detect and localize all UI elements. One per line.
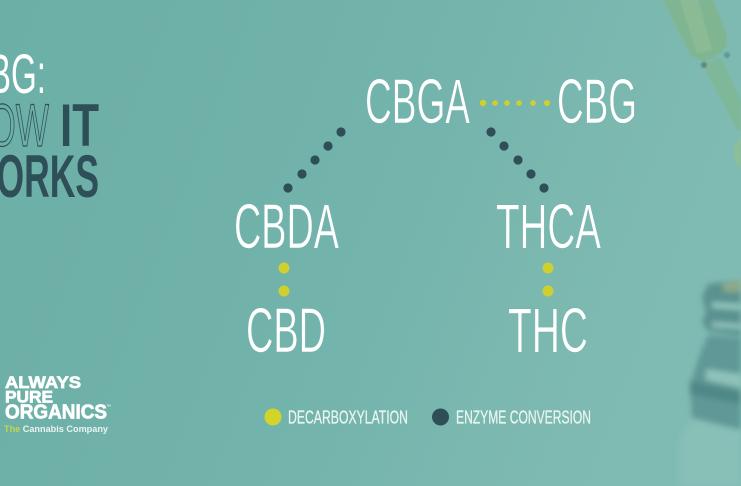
label: THCA: THCA [496,192,601,262]
logo: Always Pure Organics [4,373,111,435]
dots: CBGA to CBDA enzyme conversion [283,127,346,193]
logo tagline: The Cannabis Company [4,424,109,435]
logo: Always Pure Organics: PURE [5,388,53,406]
dots: CBGA to CBG decarboxylation [480,100,550,106]
dots: THCA to THC decarboxylation [542,262,554,296]
label: CBGA: CBGA [365,67,470,137]
legend [264,406,591,428]
image: glass dropper [663,0,741,168]
legend item: decarboxylation [264,406,408,428]
label: CBDA: CBDA [234,192,339,262]
title line: HOW IT: IT [60,92,99,159]
logo: Always Pure Organics: ORGANICS [5,402,107,424]
label: THC: THC [508,296,588,366]
legend item: enzyme conversion: ENZYME CONVERSION [456,406,591,428]
dots: CBGA to THCA enzyme conversion [486,127,549,193]
dots: CBDA to CBD decarboxylation [278,262,290,296]
logo: Always Pure Organics: ™ [106,404,111,410]
diagram: cannabinoid pathway [234,67,637,366]
legend item: enzyme conversion [432,406,591,428]
title [0,42,99,210]
legend item: decarboxylation: DECARBOXYLATION [288,406,408,428]
logo: Always Pure Organics: ALWAYS [5,373,81,392]
label: CBD: CBD [246,296,326,366]
label: CBG: CBG [557,67,637,137]
image: glass bottle [680,280,741,486]
